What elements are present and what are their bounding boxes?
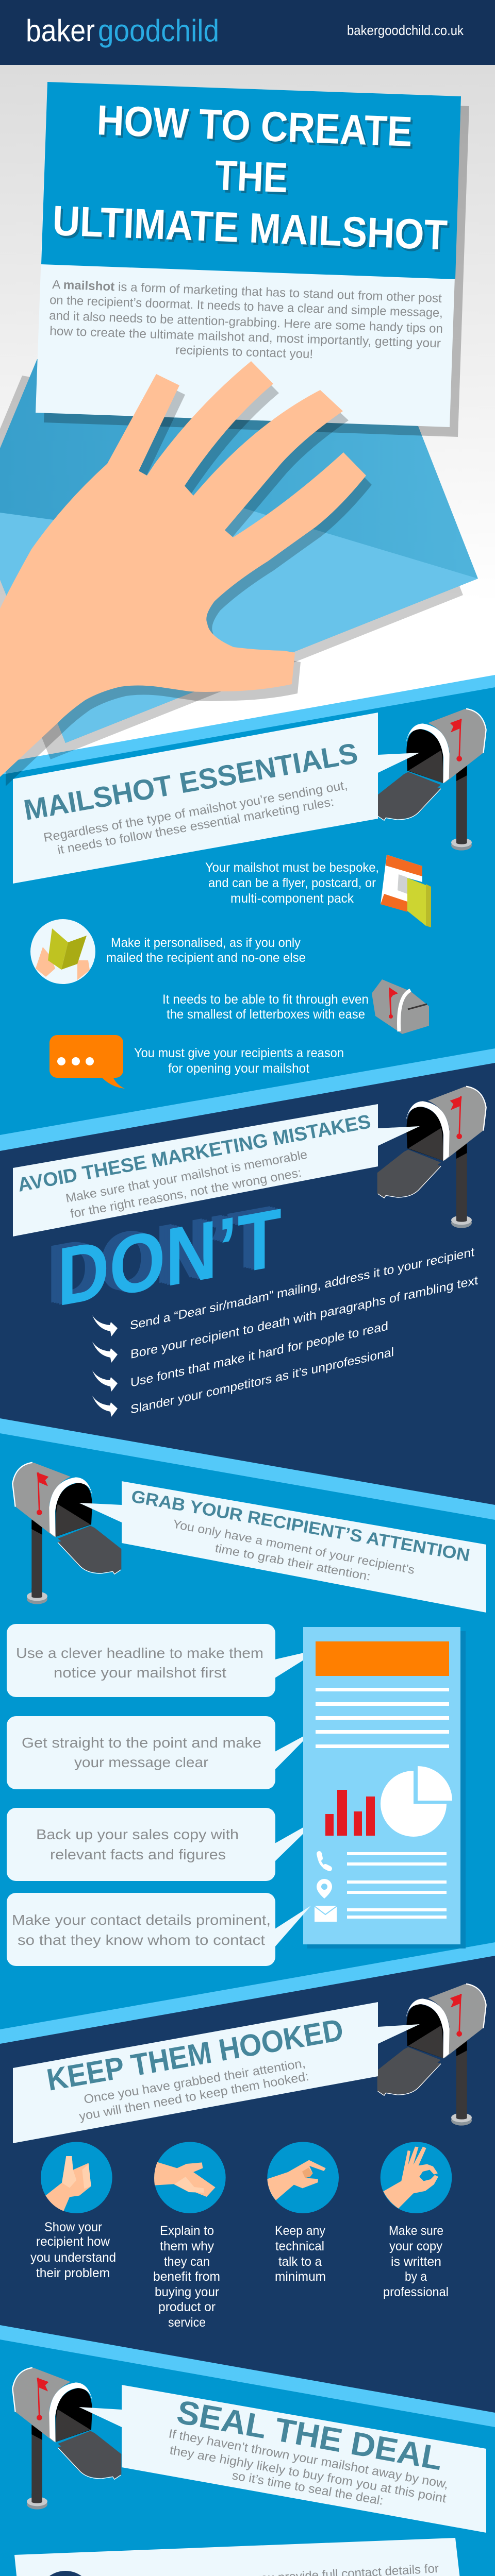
intro text: you will then need to keep them hooked: — [78, 2070, 310, 2124]
intro text: on the recipient’s doormat. It needs to have a clear and simple message, — [50, 293, 443, 320]
banner — [79, 2385, 486, 2533]
panel: avoid these marketing mistakes — [13, 1087, 486, 1417]
tip 1 text: recipient how — [36, 2234, 110, 2249]
callout: message — [7, 1716, 313, 1789]
banner — [13, 2002, 420, 2143]
panel: mailshot essentials — [13, 709, 486, 1089]
intro text: time to grab their attention: — [214, 1541, 372, 1583]
list of mistakes — [130, 1245, 478, 1417]
illustration: envelope — [0, 359, 478, 759]
heading: don't: DON’T — [54, 1191, 278, 1324]
rule 3 text: the smallest of letterboxes with ease — [167, 1007, 365, 1022]
tip 4 text — [383, 2224, 449, 2299]
rule 3 text: It needs to be able to fit through even — [162, 992, 369, 1007]
rule 1 text: multi-component pack — [230, 891, 354, 906]
tip 2 text: them why — [160, 2239, 214, 2253]
icon: open mailbox — [377, 1984, 486, 2126]
tip 2 text: benefit from — [153, 2269, 220, 2284]
rule 4 text — [134, 1046, 344, 1076]
tip 3 text: minimum — [275, 2269, 326, 2284]
illustration: hand — [0, 361, 372, 786]
intro text: You only have a moment of your recipient’s — [172, 1517, 416, 1577]
rule 1 text: Your mailshot must be bespoke, — [205, 860, 379, 875]
tip 2 text: buying your — [155, 2285, 219, 2299]
icon: leaflet pack — [381, 855, 431, 927]
list of mistakes: Slander your competitors as it’s unprofessional — [130, 1345, 394, 1417]
intro text: Regardless of the type of mailshot you’re sending out, — [42, 778, 349, 845]
icon: hand gesture 4 — [381, 2142, 452, 2213]
intro text: for the right reasons, not the wrong ones: — [69, 1166, 303, 1221]
header logo: goodchild — [98, 13, 219, 48]
title: HOW TO CREATE — [98, 99, 415, 158]
tip 4 text: professional — [383, 2285, 449, 2299]
tip 3 text: Keep any — [275, 2224, 325, 2238]
tip 4 text: your copy — [389, 2239, 442, 2253]
title: THE — [214, 152, 289, 201]
callout: headline — [7, 1624, 322, 1697]
rule 2 text — [106, 936, 306, 965]
icon: hand gesture 2 — [154, 2142, 226, 2213]
pie chart — [381, 1766, 452, 1837]
heading: KEEP THEM HOOKED — [44, 2012, 346, 2097]
header url: bakergoodchild.co.uk — [347, 23, 464, 38]
icon: open mailbox — [377, 709, 486, 851]
panel: seal the deal — [12, 2368, 486, 2576]
callout: message: Get straight to the point and make — [22, 1735, 261, 1751]
icon: open mailbox — [12, 2368, 121, 2510]
intro text: Make sure that your mailshot is memorable — [64, 1147, 308, 1206]
tip 3 text — [275, 2224, 326, 2284]
tip 1 text: Show your — [44, 2220, 102, 2234]
callout: contact details: so that they know whom to contact — [18, 1932, 265, 1948]
title: THE — [216, 155, 291, 204]
contact lines — [347, 1852, 447, 1919]
intro text: Once you have grabbed their attention, — [83, 2056, 306, 2107]
icon: phone — [38, 2571, 93, 2576]
icon: speech bubble — [50, 1035, 125, 1089]
intro text: and it also needs to be attention-grabbing. Here are some handy tips on — [49, 309, 443, 336]
panel: intro paper — [36, 82, 469, 437]
icon: closed mailbox — [372, 979, 429, 1034]
banner — [79, 1481, 486, 1613]
tip 4 text: is written — [391, 2255, 441, 2269]
icon: phone — [319, 1854, 329, 1869]
intro text: how to create the ultimate mailshot and, most importantly, getting your — [50, 324, 441, 350]
document mock-up — [303, 1627, 466, 1948]
tip 4 text: Make sure — [389, 2224, 443, 2238]
header logo — [26, 13, 219, 48]
callout: contact details: Make your contact details prominent, — [12, 1912, 271, 1928]
intro text: If they haven’t thrown your mailshot away by now, — [168, 2427, 450, 2492]
callout: facts — [7, 1808, 319, 1881]
icon: location pin — [317, 1879, 332, 1899]
icon: envelope — [315, 1906, 337, 1922]
heading: don't: DON’T — [46, 1189, 271, 1321]
title: HOW TO CREATE — [96, 97, 413, 156]
tip 3 text: talk to a — [278, 2255, 322, 2269]
icon: open mailbox — [377, 1087, 486, 1228]
tip 4 text: by a — [405, 2269, 427, 2284]
rule 1 text: and can be a flyer, postcard, or — [208, 876, 376, 890]
panel: keep them hooked — [13, 1984, 486, 2330]
intro text: so it’s time to seal the deal: — [231, 2468, 384, 2508]
tip 1 text — [30, 2220, 116, 2280]
heading: SEAL THE DEAL — [174, 2393, 446, 2477]
page background — [0, 0, 495, 778]
rule 2 text: Make it personalised, as if you only — [111, 936, 301, 950]
rule 4 text: You must give your recipients a reason — [134, 1046, 344, 1060]
icon: hands holding a card — [30, 919, 95, 984]
tip 3 text: technical — [275, 2239, 324, 2253]
list of mistakes: Use fonts that make it hard for people to read — [130, 1319, 388, 1390]
tip 1 text: you understand — [30, 2250, 116, 2265]
heading: GRAB YOUR RECIPIENT’S ATTENTION — [130, 1486, 471, 1566]
heading: MAILSHOT ESSENTIALS — [21, 737, 360, 826]
list arrows — [92, 1315, 118, 1417]
tip 1 text: their problem — [36, 2266, 110, 2280]
heading: don't: DON’T — [49, 1189, 273, 1322]
header logo: baker — [26, 13, 95, 48]
rule 1 text — [205, 860, 379, 906]
bar chart — [325, 1790, 375, 1836]
note paper — [14, 2538, 482, 2576]
intro text: it needs to follow these essential marketing rules: — [56, 795, 335, 857]
callout: headline: notice your mailshot first — [54, 1665, 226, 1681]
intro text — [49, 278, 443, 361]
rule 3 text — [162, 992, 369, 1022]
section bands and backgrounds — [0, 675, 495, 2576]
list of mistakes: Bore your recipient to death with paragraphs of rambling text — [130, 1274, 478, 1362]
list of mistakes: Send a “Dear sir/madam” mailing, address it to your recipient — [130, 1245, 474, 1333]
intro text: recipients to contact you! — [175, 343, 314, 361]
tip 2 text: Explain to — [160, 2224, 214, 2238]
callout: headline: Use a clever headline to make them — [16, 1645, 263, 1661]
callout: contact details — [7, 1893, 311, 1966]
tip 2 text — [153, 2224, 220, 2330]
rule 4 text: for opening your mailshot — [168, 1061, 309, 1076]
heading: don't: DON’T — [52, 1190, 276, 1323]
panel: grab your recipient's attention — [7, 1463, 486, 1966]
intro text: they are highly likely to buy from you at this point — [169, 2443, 448, 2505]
banner — [13, 713, 420, 884]
tip 2 text: they can — [164, 2255, 210, 2269]
rule 2 text: mailed the recipient and no-one else — [106, 951, 306, 965]
title: ULTIMATE MAILSHOT — [52, 197, 448, 259]
title — [52, 97, 450, 262]
icon: open mailbox — [12, 1463, 121, 1604]
intro text: A mailshot is a form of marketing that has to stand out from other post — [52, 278, 442, 306]
callout: facts: relevant facts and figures — [50, 1846, 226, 1862]
icon: hand gesture 3 — [267, 2142, 339, 2213]
callout: message: your message clear — [74, 1754, 208, 1770]
title: ULTIMATE MAILSHOT — [54, 200, 450, 262]
banner — [13, 1104, 420, 1236]
callout: facts: Back up your sales copy with — [36, 1826, 239, 1842]
heading: don't: DON’T — [57, 1191, 282, 1324]
heading: AVOID THESE MARKETING MISTAKES — [16, 1111, 372, 1196]
tip 2 text: product or — [158, 2300, 216, 2314]
tip 2 text: service — [168, 2315, 206, 2330]
icon: hand gesture 1 — [41, 2142, 112, 2213]
header bar — [0, 0, 495, 65]
